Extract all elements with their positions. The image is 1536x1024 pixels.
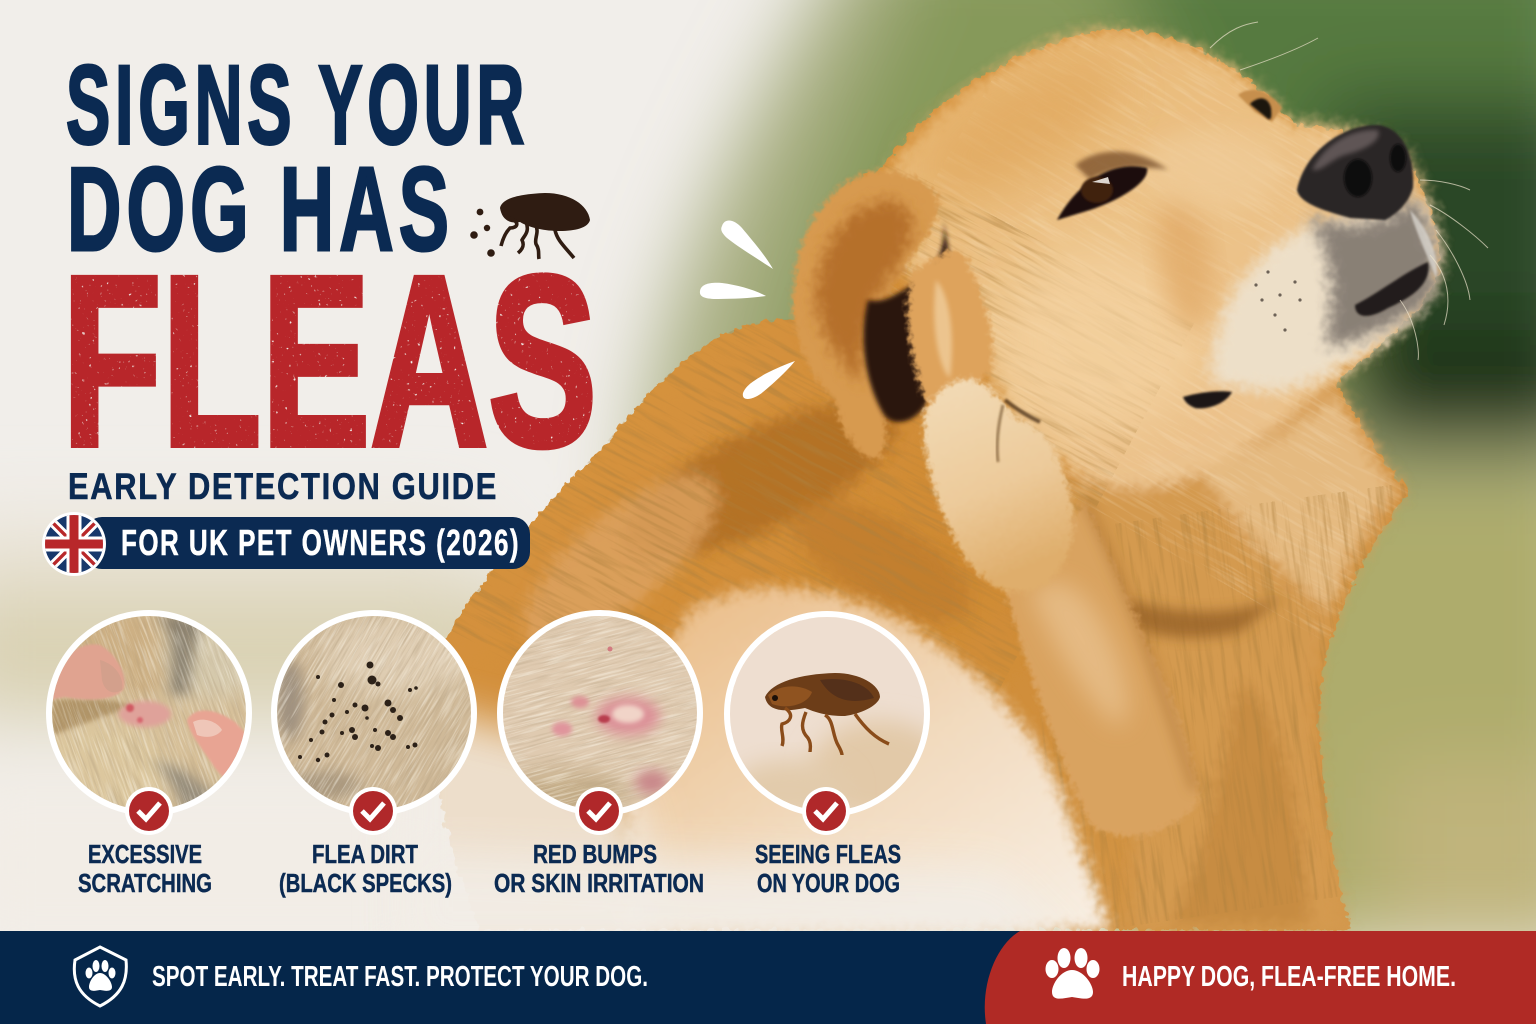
title: dog has: DOG HAS bbox=[67, 143, 454, 276]
muzzle grey bbox=[1306, 195, 1436, 345]
icon: paw bbox=[1046, 948, 1100, 999]
title bbox=[62, 42, 597, 497]
lower left fades bbox=[400, 700, 1090, 960]
title: fleas: FLEAS bbox=[62, 226, 597, 497]
banner pill bbox=[85, 517, 530, 569]
ear inner shadow bbox=[864, 212, 952, 422]
scratch motion marks bbox=[700, 220, 795, 399]
sign 4: seeing fleas bbox=[727, 614, 950, 898]
label bbox=[78, 839, 212, 898]
icon: shield with paw bbox=[74, 947, 126, 1006]
photo: fingers parting fur bbox=[52, 616, 246, 807]
ear flap bbox=[793, 171, 940, 460]
arm bbox=[1005, 500, 1200, 836]
nose bbox=[1297, 125, 1413, 220]
photo ring bbox=[49, 613, 249, 813]
toe gap bbox=[997, 405, 1003, 462]
icon: union jack bbox=[42, 512, 106, 576]
fur streak texture bbox=[451, 30, 1434, 930]
footer bar bbox=[0, 931, 1536, 1024]
label: SEEING FLEAS bbox=[755, 839, 901, 869]
pale foreleg bbox=[620, 588, 1110, 930]
mouth corner bbox=[1183, 391, 1232, 408]
lip line bbox=[1355, 262, 1428, 316]
muzzle cream bbox=[1210, 200, 1438, 391]
face tone highlights bbox=[902, 36, 1285, 638]
fur tone masses bbox=[499, 31, 1440, 930]
eyes bbox=[1057, 90, 1282, 220]
check badge bbox=[349, 787, 397, 835]
whisker dots bbox=[1254, 270, 1302, 332]
sign 1: excessive scratching bbox=[46, 610, 252, 892]
raised paw and arm bbox=[923, 379, 1200, 836]
label: (BLACK SPECKS) bbox=[279, 868, 452, 898]
label: SCRATCHING bbox=[78, 868, 212, 898]
photo: irritated skin bbox=[503, 616, 697, 807]
label bbox=[494, 839, 704, 898]
dog silhouette bbox=[432, 29, 1440, 930]
label: FLEA DIRT bbox=[312, 839, 418, 869]
icon: flea with dirt specks bbox=[470, 193, 590, 259]
sign 2: flea dirt bbox=[271, 610, 477, 898]
whiskers bbox=[1210, 22, 1488, 360]
label bbox=[279, 839, 452, 898]
subtitle: early detection guide: EARLY DETECTION GUIDE bbox=[68, 466, 498, 507]
label: EXCESSIVE bbox=[88, 839, 202, 869]
label: OR SKIN IRRITATION bbox=[494, 868, 704, 898]
muzzle bbox=[1210, 195, 1438, 391]
photo: black specks in fur bbox=[277, 616, 471, 808]
footer navy band bbox=[0, 931, 1536, 1024]
photo ring bbox=[727, 614, 927, 814]
sign 3: red bumps bbox=[494, 610, 703, 892]
ear bbox=[793, 171, 992, 460]
illustration: golden retriever scratching bbox=[197, 0, 1536, 934]
photo ring bbox=[274, 613, 474, 813]
label: ON YOUR DOG bbox=[757, 868, 900, 898]
footer tagline: SPOT EARLY. TREAT FAST. PROTECT YOUR DOG. bbox=[152, 961, 648, 993]
paw bbox=[923, 379, 1073, 592]
photo: flea on pale fur bbox=[730, 617, 924, 808]
photo ring bbox=[500, 613, 700, 813]
check badge bbox=[575, 787, 623, 835]
ear inner tuft bbox=[908, 251, 992, 421]
label: RED BUMPS bbox=[533, 839, 657, 869]
banner text: FOR UK PET OWNERS (2026) bbox=[121, 522, 520, 563]
label bbox=[755, 839, 901, 898]
title: signs your: SIGNS YOUR bbox=[66, 42, 529, 168]
footer red panel bbox=[985, 931, 1536, 1024]
banner: for uk pet owners bbox=[40, 510, 530, 580]
check badge bbox=[125, 787, 173, 835]
check badge bbox=[802, 787, 850, 835]
